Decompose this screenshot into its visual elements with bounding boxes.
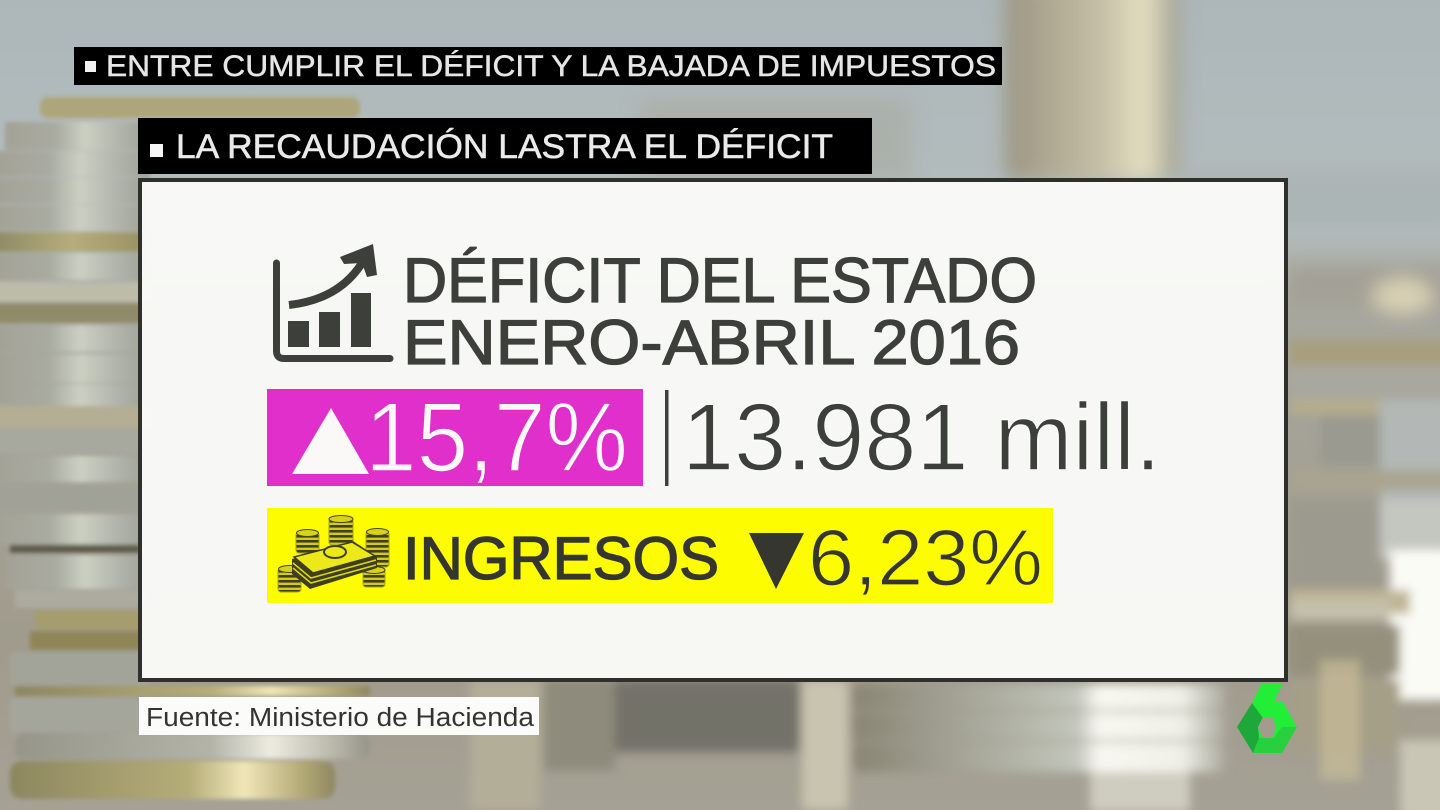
yellow callout: ingresos xyxy=(267,508,1053,603)
icon: down triangle xyxy=(749,533,804,589)
icon: up triangle xyxy=(292,408,369,474)
divider and amount: 13.981 mill. xyxy=(682,384,1161,491)
bullet square xyxy=(85,61,96,72)
section heading bar xyxy=(138,118,872,174)
yellow callout: ingresos: INGRESOS xyxy=(403,525,719,592)
coin stack left xyxy=(0,97,370,799)
icon: money and coins xyxy=(278,516,389,592)
source label xyxy=(139,697,539,735)
title: ENERO-ABRIL 2016 xyxy=(403,308,1020,378)
title: DÉFICIT DEL ESTADO xyxy=(403,246,1037,316)
coin stack right xyxy=(1290,340,1440,810)
coin stacks xyxy=(278,518,389,592)
bullet square xyxy=(150,144,163,157)
source label: Fuente: Ministerio de Hacienda xyxy=(146,704,535,732)
yellow callout: ingresos: 6,23% xyxy=(808,513,1043,602)
stack of bills xyxy=(292,541,377,589)
title xyxy=(403,246,1037,378)
coin stack bottom centre xyxy=(470,680,1226,810)
blurred coin tower top right xyxy=(640,0,1440,314)
top headline bar xyxy=(74,47,1002,85)
magenta callout: +15,7%: 15,7% xyxy=(365,382,628,492)
top headline text: ENTRE CUMPLIR EL DÉFICIT Y LA BAJADA DE IMPUESTOS xyxy=(106,50,996,83)
icon: rising bar chart with arrow xyxy=(276,244,390,358)
section heading text: LA RECAUDACIÓN LASTRA EL DÉFICIT xyxy=(176,127,833,166)
main panel xyxy=(140,180,1286,680)
logo: laSexta green 6 xyxy=(1237,683,1297,753)
